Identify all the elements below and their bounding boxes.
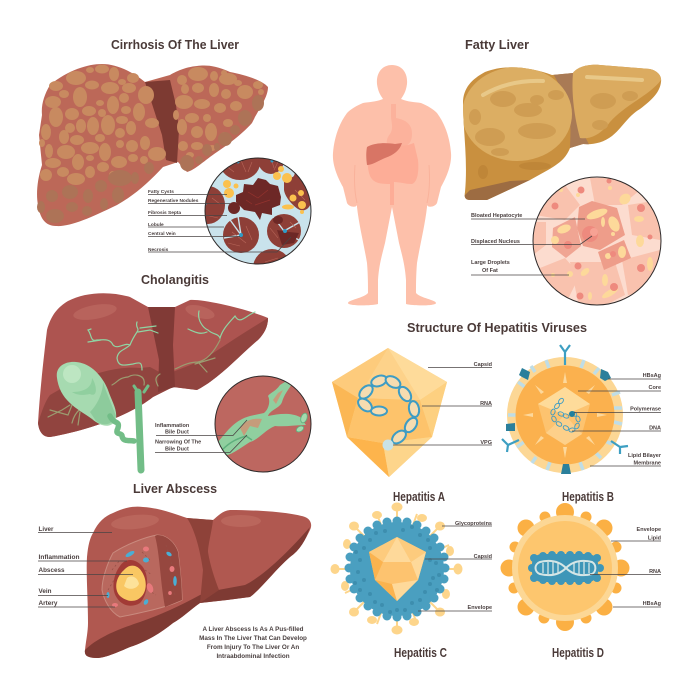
gallbladder xyxy=(57,362,116,426)
labels: hepatitis B xyxy=(572,373,662,466)
labels: hepatitis B: DNA xyxy=(649,426,661,432)
illustration: fatty liver xyxy=(460,60,665,205)
labels: hepatitis B: Lipid Bilayer xyxy=(628,453,662,459)
labels: hepatitis B: Polymerase xyxy=(630,406,661,412)
text block: abscess description: Mass In The Liver That Can Develop xyxy=(199,635,307,642)
inset: fatty liver micrograph xyxy=(533,177,661,308)
lobules xyxy=(206,158,310,264)
labels: hepatitis A xyxy=(393,362,492,446)
organ: stomach xyxy=(387,104,412,148)
inset: cirrhosis micrograph xyxy=(204,158,312,264)
section: abscess cross-section xyxy=(102,535,182,617)
text block: abscess description: From Injury To The Liver Or An xyxy=(207,644,299,651)
illustration: cholangitis liver xyxy=(38,293,268,470)
virus: hepatitis D xyxy=(500,503,630,631)
labels: hepatitis C xyxy=(418,521,492,611)
caption: hepatitis B: Hepatitis B xyxy=(562,489,614,504)
labels: liver abscess: Vein xyxy=(38,588,52,595)
title: structure of hepatitis viruses: Structure Of Hepatitis Viruses xyxy=(407,320,587,335)
labels: hepatitis A: VPG xyxy=(480,440,492,446)
labels: cholangitis xyxy=(155,420,247,452)
labels: fatty liver: Of Fat xyxy=(482,268,498,274)
labels: hepatitis C: Envelope xyxy=(468,605,492,611)
illustration: abscess liver xyxy=(85,507,311,658)
caption: hepatitis D: Hepatitis D xyxy=(552,645,604,660)
organ: liver xyxy=(366,143,402,165)
labels: cirrhosis: Central Vein xyxy=(148,231,176,237)
virus: hepatitis C xyxy=(332,504,462,634)
labels: hepatitis B: Membrane xyxy=(633,460,661,466)
labels: hepatitis D: HBsAg xyxy=(643,601,661,607)
labels: fatty liver: Displaced Nucleus xyxy=(471,239,520,245)
labels: cirrhosis: Regenerative Nodules xyxy=(148,198,199,204)
central nodule xyxy=(236,178,281,220)
labels: fatty liver xyxy=(471,213,592,275)
labels: liver abscess: Liver xyxy=(38,526,54,533)
labels: fatty liver: Bloated Hepatocyte xyxy=(471,213,522,219)
labels: hepatitis B: HBsAg xyxy=(643,373,661,379)
mottling xyxy=(469,90,638,156)
caption: hepatitis A: Hepatitis A xyxy=(393,489,445,504)
labels: liver abscess xyxy=(38,526,133,607)
infographic: liver diseases xyxy=(37,40,662,660)
labels: liver abscess: Artery xyxy=(38,600,58,607)
labels: cirrhosis xyxy=(148,189,291,253)
inset: bile duct xyxy=(215,376,311,472)
labels: cholangitis: Bile Duct xyxy=(165,446,189,452)
bile ducts xyxy=(88,311,255,370)
text block: abscess description xyxy=(199,626,307,660)
labels: cholangitis: Inflammation xyxy=(155,423,190,429)
title: cirrhosis: Cirrhosis Of The Liver xyxy=(111,37,239,52)
virus: hepatitis A xyxy=(332,348,447,477)
labels: liver abscess: Abscess xyxy=(38,567,65,574)
labels: cirrhosis: Lobule xyxy=(148,222,164,228)
labels: hepatitis D: Lipid xyxy=(648,536,661,542)
labels: hepatitis C: Capsid xyxy=(474,554,492,560)
nodules xyxy=(39,64,264,185)
title: liver abscess: Liver Abscess xyxy=(133,481,217,496)
title: cholangitis: Cholangitis xyxy=(141,272,209,287)
labels: fatty liver: Large Droplets xyxy=(471,260,510,266)
labels: cirrhosis: Necrosis xyxy=(148,247,169,253)
text block: abscess description: Intraabdominal Infection xyxy=(216,653,290,660)
labels: hepatitis C: Glycoproteins xyxy=(455,521,492,527)
labels: hepatitis B: Core xyxy=(648,385,661,391)
organ: intestines xyxy=(368,143,418,205)
labels: cholangitis: Narrowing Of The xyxy=(155,440,201,446)
title: fatty liver: Fatty Liver xyxy=(465,37,529,52)
virus: hepatitis B xyxy=(502,345,628,474)
labels: hepatitis D xyxy=(590,527,661,607)
labels: cholangitis: Bile Duct xyxy=(165,430,189,436)
labels: hepatitis A: RNA xyxy=(480,401,492,407)
labels: hepatitis D: RNA xyxy=(649,569,661,575)
labels: cirrhosis: Fatty Cysts xyxy=(148,189,174,195)
labels: liver abscess: Inflammation xyxy=(38,554,80,561)
caption: hepatitis C: Hepatitis C xyxy=(394,645,447,660)
figure: human body xyxy=(333,65,451,305)
panel: cirrhosis liver xyxy=(37,64,268,226)
labels: hepatitis A: Capsid xyxy=(474,362,492,368)
text block: abscess description: A Liver Abscess Is As A Pus-filled xyxy=(202,626,304,633)
labels: hepatitis D: Envelope xyxy=(637,527,661,533)
cystic duct and common duct xyxy=(110,386,148,470)
labels: cirrhosis: Fibrosis Septa xyxy=(148,210,181,216)
